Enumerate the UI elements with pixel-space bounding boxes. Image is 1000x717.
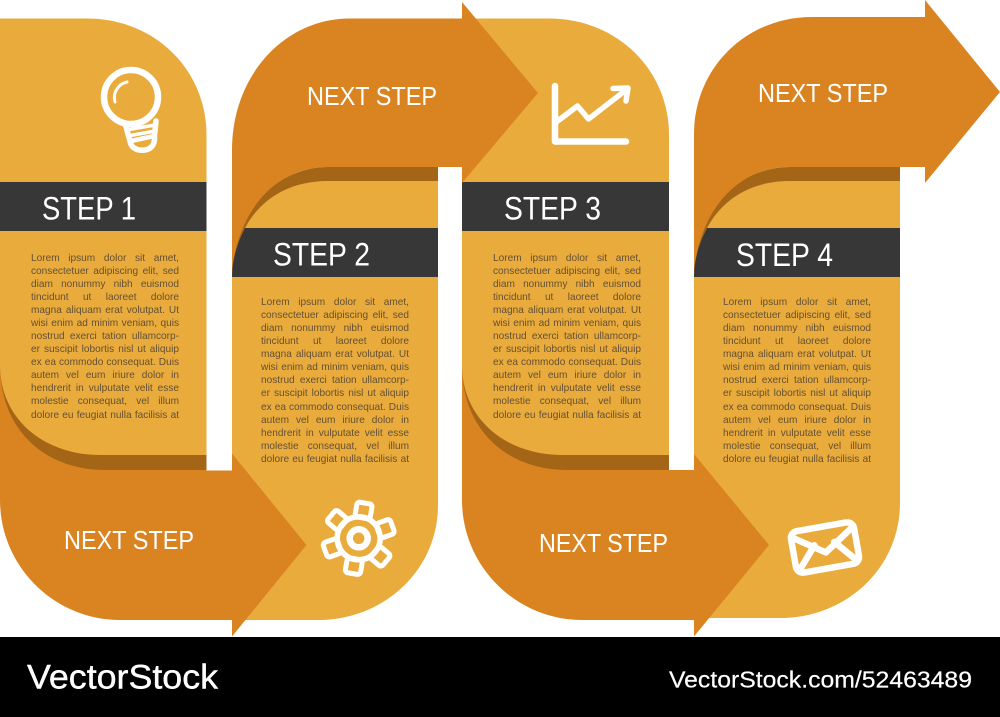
text block: step 2 body: Lorem ipsum dolor sit amet,: [261, 297, 409, 308]
panel: step 1: [0, 18, 206, 470]
text block: step 2 body: tincidunt ut laoreet dolore: [261, 336, 409, 347]
text block: step 4 body: molestie consequat, vel illum: [723, 441, 871, 452]
text block: step 1 body: nostrud exerci tation ullamcorp-: [31, 331, 179, 342]
icon: gear: [322, 502, 395, 575]
text block: step 2 body: hendrerit in vulputate velit esse: [261, 428, 409, 439]
icon: rising chart: [555, 86, 628, 142]
icon: light bulb: [104, 70, 158, 150]
text block: step 3 body: hendrerit in vulputate velit esse: [493, 383, 641, 394]
text block: step 4 body: er suscipit lobortis nisl ut aliquip: [723, 388, 871, 399]
text block: step 3 body: [493, 253, 641, 421]
arrow: step 1 next step: [0, 360, 306, 636]
panel: step 3: STEP 3: [504, 190, 601, 226]
arrow: step 1 next step: NEXT STEP: [64, 527, 194, 555]
text block: step 1 body: wisi enim ad minim veniam, quis: [31, 318, 179, 329]
text block: step 3 body: nostrud exerci tation ullamcorp-: [493, 331, 641, 342]
text block: step 4 body: consectetuer adipiscing elit, sed: [723, 310, 871, 321]
panel: step 4: STEP 4: [736, 237, 833, 273]
text block: step 3 body: autem vel eum iriure dolor in: [493, 370, 641, 381]
text block: step 3 body: consectetuer adipiscing elit, sed: [493, 266, 641, 277]
text block: step 4 body: nostrud exerci tation ullamcorp-: [723, 375, 871, 386]
footer bar: VectorStock: [27, 659, 219, 697]
panel: step 3: [462, 18, 669, 470]
footer bar: VectorStock.com/52463489: [669, 667, 972, 693]
text block: step 4 body: autem vel eum iriure dolor in: [723, 415, 871, 426]
arrow: step 2 next step: NEXT STEP: [307, 83, 437, 111]
text block: step 4 body: wisi enim ad minim veniam, quis: [723, 362, 871, 373]
arrow: step 3 next step: [462, 360, 769, 636]
text block: step 2 body: diam nonummy nibh euismod: [261, 323, 409, 334]
text block: step 1 body: autem vel eum iriure dolor in: [31, 370, 179, 381]
text block: step 2 body: dolore eu feugiat nulla facilisis at: [261, 454, 409, 465]
text block: step 4 body: Lorem ipsum dolor sit amet,: [723, 297, 871, 308]
text block: step 1 body: Lorem ipsum dolor sit amet,: [31, 253, 179, 264]
text block: step 2 body: magna aliquam erat volutpat. Ut: [261, 349, 409, 360]
icon: envelope: [790, 521, 860, 574]
text block: step 4 body: diam nonummy nibh euismod: [723, 323, 871, 334]
text block: step 2 body: ex ea commodo consequat. Duis: [261, 402, 409, 413]
text block: step 2 body: er suscipit lobortis nisl ut aliquip: [261, 388, 409, 399]
text block: step 1 body: ex ea commodo consequat. Duis: [31, 357, 179, 368]
text block: step 3 body: Lorem ipsum dolor sit amet,: [493, 253, 641, 264]
panel: step 2: STEP 2: [273, 236, 370, 272]
arrow: step 3 next step: NEXT STEP: [539, 530, 668, 558]
text block: step 2 body: consectetuer adipiscing elit, sed: [261, 310, 409, 321]
text block: step 1 body: diam nonummy nibh euismod: [31, 279, 179, 290]
panel: step 2: [232, 167, 438, 620]
arrow: step 4 next step: [694, 0, 1000, 277]
text block: step 4 body: ex ea commodo consequat. Duis: [723, 402, 871, 413]
text block: step 3 body: ex ea commodo consequat. Duis: [493, 357, 641, 368]
text block: step 2 body: autem vel eum iriure dolor in: [261, 415, 409, 426]
text block: step 3 body: er suscipit lobortis nisl ut aliquip: [493, 344, 641, 355]
text block: step 1 body: consectetuer adipiscing elit, sed: [31, 266, 179, 277]
text block: step 3 body: diam nonummy nibh euismod: [493, 279, 641, 290]
panel: step 1: STEP 1: [42, 190, 136, 226]
text block: step 1 body: tincidunt ut laoreet dolore: [31, 292, 179, 303]
text block: step 3 body: molestie consequat, vel illum: [493, 396, 641, 407]
text block: step 3 body: magna aliquam erat volutpat. Ut: [493, 305, 641, 316]
text block: step 1 body: dolore eu feugiat nulla facilisis at: [31, 410, 179, 421]
text block: step 4 body: dolore eu feugiat nulla facilisis at: [723, 454, 871, 465]
text block: step 2 body: wisi enim ad minim veniam, quis: [261, 362, 409, 373]
text block: step 3 body: tincidunt ut laoreet dolore: [493, 292, 641, 303]
arrow: step 2 next step: [232, 2, 538, 277]
text block: step 1 body: magna aliquam erat volutpat. Ut: [31, 305, 179, 316]
text block: step 3 body: dolore eu feugiat nulla facilisis at: [493, 410, 641, 421]
text block: step 3 body: wisi enim ad minim veniam, quis: [493, 318, 641, 329]
text block: step 4 body: magna aliquam erat volutpat. Ut: [723, 349, 871, 360]
text block: step 4 body: hendrerit in vulputate velit esse: [723, 428, 871, 439]
text block: step 1 body: molestie consequat, vel illum: [31, 396, 179, 407]
text block: step 4 body: [723, 297, 871, 465]
arrow: step 4 next step: NEXT STEP: [758, 80, 888, 108]
footer bar: [0, 637, 1000, 717]
text block: step 2 body: [261, 297, 409, 465]
text block: step 1 body: er suscipit lobortis nisl ut aliquip: [31, 344, 179, 355]
text block: step 4 body: tincidunt ut laoreet dolore: [723, 336, 871, 347]
text block: step 1 body: hendrerit in vulputate velit esse: [31, 383, 179, 394]
text block: step 2 body: molestie consequat, vel illum: [261, 441, 409, 452]
panel: step 4: [694, 167, 900, 618]
text block: step 1 body: [31, 253, 179, 421]
text block: step 2 body: nostrud exerci tation ullamcorp-: [261, 375, 409, 386]
